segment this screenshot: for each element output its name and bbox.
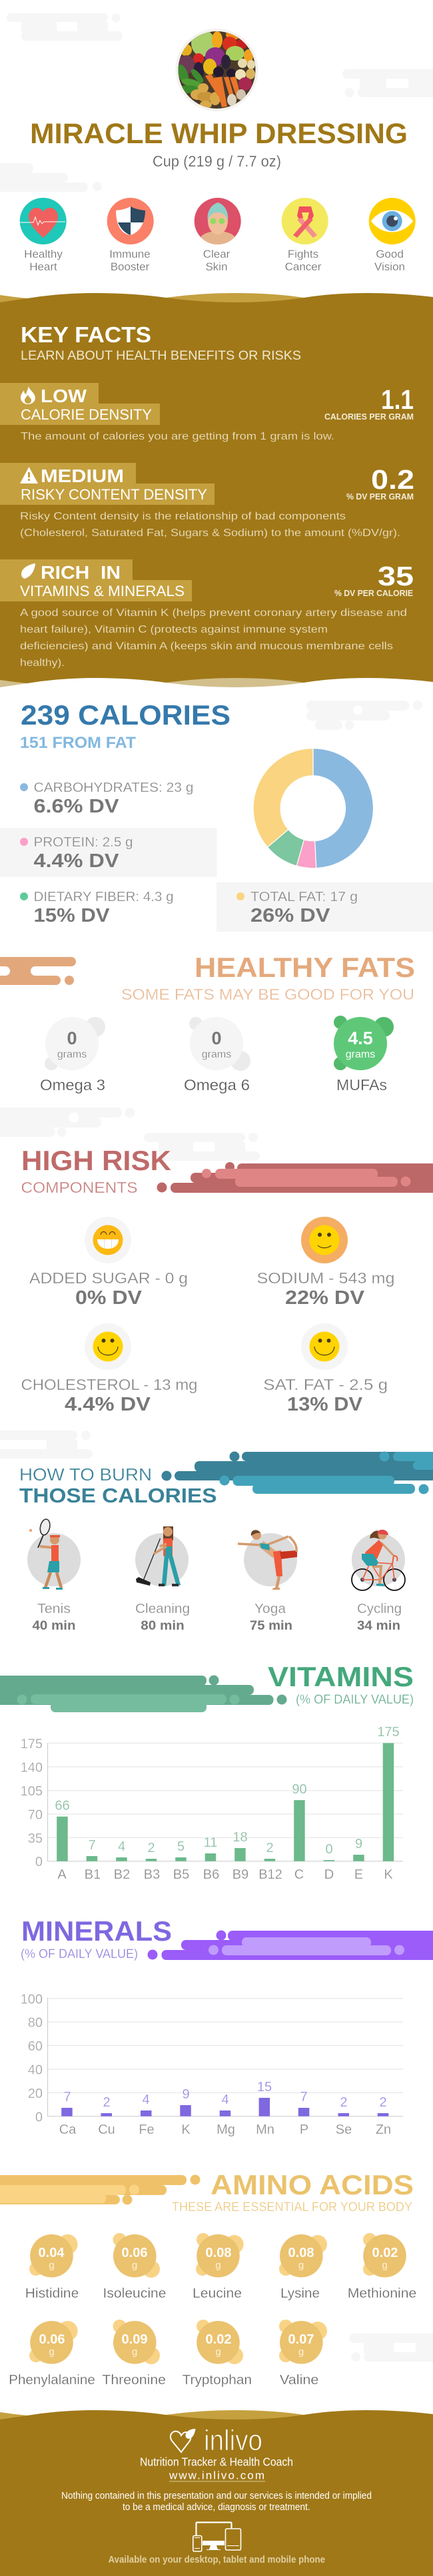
subheading: (% OF DAILY VALUE) <box>296 1693 414 1707</box>
fact: low calorie density <box>0 383 414 442</box>
fact: low calorie density: The amount of calories you are getting from 1 gram is low. <box>21 431 334 442</box>
bar chart: vitamins: 7 <box>88 1838 96 1853</box>
subheading: LEARN ABOUT HEALTH BENEFITS OR RISKS <box>21 349 301 363</box>
bar chart: vitamins: 9 <box>355 1837 362 1851</box>
fact: rich in vitamins and minerals: healthy). <box>20 657 65 669</box>
legend: protein: PROTEIN: 2.5 g <box>33 835 133 850</box>
activity: yoga: Yoga <box>254 1602 286 1616</box>
amino: threonine: g <box>132 2346 137 2358</box>
activity: cleaning: Cleaning <box>135 1602 190 1616</box>
legend: total fat: TOTAL FAT: 17 g <box>250 890 358 904</box>
amino: methionine: g <box>382 2260 388 2271</box>
heading: vitamins: VITAMINS <box>268 1661 414 1692</box>
amino: lysine: 0.08 <box>288 2246 314 2260</box>
bar chart: vitamins: 11 <box>204 1835 217 1850</box>
amino: valine: g <box>298 2346 304 2358</box>
bar chart: minerals: 2 <box>103 2095 111 2110</box>
panel: minerals <box>21 1915 433 2137</box>
fact: rich in vitamins and minerals: heart failure), Vitamin C (protects against immune system <box>20 624 328 635</box>
bar chart: vitamins: B12 <box>258 1867 282 1882</box>
subheading: components: COMPONENTS <box>21 1179 137 1196</box>
decoration: bars <box>148 1930 433 1960</box>
bar chart: minerals: P <box>300 2122 308 2137</box>
benefit labels: Skin <box>205 260 228 273</box>
bar chart: vitamins <box>21 1725 403 1882</box>
subheading: from fat: 151 FROM FAT <box>20 734 136 752</box>
fact: medium risky content density: (Cholesterol, Saturated Fat, Sugars & Sodium) to the amount (%DV/gr). <box>20 527 400 539</box>
serving size: Cup (219 g / 7.7 oz) <box>153 153 281 170</box>
footer <box>0 2410 433 2576</box>
bar chart: minerals: 60 <box>28 2039 43 2054</box>
benefit labels: Heart <box>29 260 57 273</box>
component: sodium: 22% DV <box>285 1287 365 1309</box>
decoration: bars <box>0 957 76 985</box>
amino: phenylalanine: Phenylalanine <box>9 2373 95 2388</box>
bar chart: vitamins: B1 <box>85 1867 101 1882</box>
heading: calories: 239 CALORIES <box>21 699 230 731</box>
background clouds: middle <box>0 1108 260 1161</box>
bar chart: vitamins: 70 <box>28 1808 43 1823</box>
amino: threonine: 0.09 <box>122 2332 147 2347</box>
website link: www.inlivo.com <box>169 2469 264 2482</box>
fact: medium risky content density: Risky Content density is the relationship of bad components <box>20 511 346 522</box>
bar chart: vitamins: 90 <box>292 1782 307 1797</box>
availability note: Available on your desktop, tablet and mobile phone <box>108 2554 325 2565</box>
disclaimer: Nothing contained in this presentation and our services is intended or implied <box>61 2491 372 2501</box>
legend: dietary fiber: 15% DV <box>33 905 110 926</box>
disclaimer: to be a medical advice, diagnosis or treatment. <box>123 2502 310 2513</box>
amino: methionine: 0.02 <box>372 2246 398 2260</box>
bar chart: vitamins: 2 <box>147 1841 155 1855</box>
fact: medium risky content density: RISKY CONTENT DENSITY <box>21 486 207 503</box>
donut chart <box>253 749 373 868</box>
activity: tennis <box>27 1518 81 1633</box>
bar chart: vitamins: B2 <box>114 1867 130 1882</box>
amino: valine: Valine <box>280 2373 318 2388</box>
amino: valine <box>279 2320 327 2388</box>
amino: lysine <box>279 2234 327 2301</box>
bar chart: vitamins: A <box>57 1867 67 1882</box>
bar chart: vitamins: C <box>294 1867 304 1882</box>
benefit labels <box>24 248 405 273</box>
fact: low calorie density: LOW <box>41 386 87 406</box>
omega 6 <box>184 1017 250 1094</box>
bar chart: vitamins: B3 <box>144 1867 160 1882</box>
fact: rich in vitamins and minerals: deficiencies) and Vitamin A (keeps skin and mucous membrane cells <box>20 641 393 652</box>
amino: histidine: g <box>49 2260 55 2271</box>
activity: yoga: 75 min <box>250 1619 292 1633</box>
bar chart: minerals: 4 <box>221 2093 229 2107</box>
panel: vitamins <box>0 1661 414 1882</box>
bar chart: minerals: 9 <box>182 2087 190 2102</box>
amino: histidine: Histidine <box>25 2286 79 2301</box>
fact: medium risky content density: % DV PER GRAM <box>346 492 414 501</box>
bar chart: minerals: 40 <box>28 2063 43 2078</box>
component: sodium: SODIUM - 543 mg <box>257 1269 394 1287</box>
benefit labels: Vision <box>374 260 405 273</box>
icon: immune shield <box>107 198 154 244</box>
mufas: MUFAs <box>336 1076 387 1094</box>
amino: isoleucine: 0.06 <box>122 2246 147 2260</box>
bar chart: minerals: Cu <box>98 2122 115 2137</box>
legend: protein <box>20 835 133 872</box>
amino: tryptophan: Tryptophan <box>183 2373 252 2388</box>
amino: histidine: 0.04 <box>39 2246 65 2260</box>
amino: tryptophan: g <box>215 2346 221 2358</box>
fact: low calorie density: CALORIE DENSITY <box>21 406 152 423</box>
heading: amino acids: AMINO ACIDS <box>211 2169 414 2200</box>
amino: phenylalanine: 0.06 <box>39 2332 65 2347</box>
component: sodium <box>257 1217 394 1309</box>
activity: tennis: 40 min <box>32 1619 76 1633</box>
bar chart: vitamins: 66 <box>55 1799 70 1813</box>
logo: inlivo: inlivo <box>204 2424 262 2457</box>
component: saturated fat: SAT. FAT - 2.5 g <box>263 1376 388 1393</box>
bar chart: minerals: 7 <box>300 2090 308 2104</box>
omega 3: grams <box>57 1049 87 1060</box>
bar chart: minerals: 2 <box>379 2095 387 2110</box>
decoration: bars <box>157 1162 433 1193</box>
tagline: Nutrition Tracker & Health Coach <box>140 2455 293 2469</box>
fact: rich in vitamins and minerals: % DV PER CALORIE <box>334 589 413 598</box>
subheading: SOME FATS MAY BE GOOD FOR YOU <box>121 986 414 1003</box>
bar chart: minerals: Se <box>336 2122 352 2137</box>
amino: leucine <box>193 2233 244 2301</box>
bar chart: minerals: 20 <box>28 2087 43 2101</box>
bar chart: minerals: 7 <box>63 2090 71 2104</box>
panel: how to burn those calories <box>19 1452 433 1633</box>
bar chart: minerals <box>21 1992 403 2137</box>
amino: lysine: Lysine <box>280 2286 320 2301</box>
component: added sugar <box>29 1217 188 1309</box>
bar chart: minerals: Fe <box>139 2122 155 2137</box>
activity: cycling <box>352 1530 405 1633</box>
mufas: 4.5 <box>348 1028 373 1048</box>
amino: methionine: Methionine <box>348 2286 416 2301</box>
bar chart: vitamins: 2 <box>266 1841 274 1855</box>
amino: methionine <box>348 2233 416 2301</box>
bar chart: minerals: 15 <box>257 2080 272 2094</box>
subheading: (% OF DAILY VALUE) <box>21 1947 138 1961</box>
icon: good vision <box>369 198 416 244</box>
bar chart: minerals: Mn <box>256 2122 274 2137</box>
activity: yoga <box>238 1530 297 1633</box>
fact: rich in vitamins and minerals <box>0 559 414 669</box>
icon: healthy heart <box>20 198 67 244</box>
panel: calories <box>0 699 433 932</box>
subheading: THESE ARE ESSENTIAL FOR YOUR BODY <box>172 2200 412 2214</box>
bar chart: vitamins: 4 <box>118 1839 125 1854</box>
omega 6: grams <box>202 1049 231 1060</box>
activity: cleaning: 80 min <box>141 1619 185 1633</box>
fact: low calorie density: 1.1 <box>381 384 414 415</box>
panel: high risk components <box>21 1145 433 1415</box>
legend: carbohydrates: 6.6% DV <box>33 796 119 817</box>
amino: valine: 0.07 <box>288 2332 314 2347</box>
bar chart: vitamins: 18 <box>232 1830 248 1845</box>
fact: rich in vitamins and minerals: RICH IN <box>41 562 121 583</box>
bar chart: minerals: Mg <box>217 2122 235 2137</box>
bar chart: minerals: 0 <box>35 2110 43 2124</box>
bar chart: vitamins: 175 <box>21 1737 43 1752</box>
heading: healthy fats: HEALTHY FATS <box>195 952 415 983</box>
fact: medium risky content density: MEDIUM <box>41 466 124 486</box>
amino: threonine <box>102 2320 166 2388</box>
bar chart: vitamins: 5 <box>177 1839 185 1854</box>
fact: low calorie density: CALORIES PER GRAM <box>324 412 414 422</box>
fact: rich in vitamins and minerals: 35 <box>378 561 414 591</box>
legend: carbohydrates <box>20 781 193 817</box>
bar chart: minerals: K <box>181 2122 191 2137</box>
benefit labels: Immune <box>109 248 151 260</box>
icon: clear skin <box>195 198 241 248</box>
bar chart: vitamins: E <box>354 1867 363 1882</box>
background clouds: header <box>0 13 433 192</box>
amino: leucine: 0.08 <box>206 2246 231 2260</box>
benefit labels: Fights <box>288 248 318 260</box>
legend: dietary fiber: DIETARY FIBER: 4.3 g <box>33 890 173 904</box>
component: cholesterol: CHOLESTEROL - 13 mg <box>21 1376 197 1393</box>
panel: key facts <box>0 293 433 696</box>
amino: phenylalanine: g <box>49 2346 55 2358</box>
panel: healthy fats <box>0 952 415 1094</box>
bar chart: vitamins: D <box>324 1867 334 1882</box>
bar chart: vitamins: 175 <box>377 1725 400 1740</box>
bar chart: vitamins: 35 <box>28 1831 43 1846</box>
title: MIRACLE WHIP DRESSING <box>30 118 408 150</box>
mufas <box>334 1016 394 1094</box>
component: saturated fat <box>263 1323 388 1415</box>
background cloud: before burn <box>0 1431 93 1458</box>
fact: rich in vitamins and minerals: A good source of Vitamin K (helps prevent coronary artery disease and <box>20 607 407 619</box>
icon: devices <box>193 2523 241 2551</box>
activity: cycling: 34 min <box>357 1619 400 1633</box>
omega 3: 0 <box>67 1028 77 1048</box>
bar chart: vitamins: 105 <box>21 1784 43 1799</box>
icon: fights cancer ribbon <box>282 198 328 244</box>
bar chart: vitamins: 0 <box>35 1855 43 1869</box>
heading: high risk: HIGH RISK <box>21 1145 171 1176</box>
health benefits row <box>20 198 416 273</box>
bar chart: vitamins: B9 <box>232 1867 248 1882</box>
benefit labels: Healthy <box>24 248 63 260</box>
amino: histidine <box>25 2234 79 2301</box>
heading: those calories: THOSE CALORIES <box>19 1484 217 1507</box>
fact: rich in vitamins and minerals: VITAMINS & MINERALS <box>20 583 185 599</box>
benefit labels: Booster <box>111 260 150 273</box>
amino: leucine: g <box>215 2260 221 2271</box>
bar chart: minerals: Ca <box>59 2122 77 2137</box>
bar chart: minerals: 80 <box>28 2016 43 2031</box>
legend: dietary fiber <box>20 890 173 926</box>
decoration: bars <box>0 2175 200 2204</box>
amino: tryptophan <box>183 2320 252 2388</box>
amino: lysine: g <box>298 2260 304 2271</box>
component: cholesterol <box>21 1323 197 1415</box>
decoration: bars <box>0 1676 286 1712</box>
omega 6: 0 <box>211 1028 222 1048</box>
amino: leucine: Leucine <box>193 2286 242 2301</box>
benefit labels: Good <box>376 248 404 260</box>
bar chart: minerals: 2 <box>340 2095 348 2110</box>
component: added sugar: 0% DV <box>75 1287 143 1309</box>
fact: medium risky content density <box>0 463 414 539</box>
amino: tryptophan: 0.02 <box>206 2332 231 2347</box>
bar chart: minerals: Zn <box>376 2122 391 2137</box>
bar chart: vitamins: B6 <box>203 1867 219 1882</box>
omega 3: Omega 3 <box>40 1076 105 1094</box>
mufas: grams <box>346 1049 375 1060</box>
heading: key facts: KEY FACTS <box>21 322 151 347</box>
decoration: bars <box>161 1452 433 1494</box>
photo: vegetables <box>175 29 258 111</box>
bar chart: minerals: 100 <box>21 1992 43 2007</box>
benefit labels: Cancer <box>285 260 322 273</box>
disclaimer <box>61 2491 372 2513</box>
component: added sugar: ADDED SUGAR - 0 g <box>29 1269 188 1287</box>
amino: isoleucine: Isoleucine <box>103 2286 167 2301</box>
activity: cleaning <box>135 1526 190 1633</box>
panel: amino acids <box>0 2169 416 2388</box>
bar chart: vitamins: 0 <box>325 1842 333 1857</box>
legend: total fat: 26% DV <box>250 905 330 926</box>
activity: cycling: Cycling <box>357 1602 402 1616</box>
amino: isoleucine: g <box>132 2260 137 2271</box>
legend: carbohydrates: CARBOHYDRATES: 23 g <box>33 781 193 795</box>
heading: minerals: MINERALS <box>21 1915 172 1947</box>
amino: phenylalanine <box>9 2321 95 2388</box>
logo: inlivo <box>171 2424 262 2457</box>
bar chart: vitamins: B5 <box>173 1867 189 1882</box>
omega 3 <box>40 1017 105 1094</box>
bar chart: vitamins: K <box>384 1867 393 1882</box>
bar chart: minerals: 4 <box>142 2093 150 2107</box>
amino: isoleucine <box>103 2233 167 2301</box>
bar chart: vitamins: 140 <box>21 1761 43 1775</box>
heading: how to burn: HOW TO BURN <box>19 1464 152 1484</box>
benefit labels: Clear <box>203 248 230 260</box>
highlight panels <box>0 828 217 877</box>
activity: tennis: Tenis <box>37 1602 71 1616</box>
omega 6: Omega 6 <box>184 1076 250 1094</box>
fact: medium risky content density: 0.2 <box>371 464 414 495</box>
amino: threonine: Threonine <box>102 2373 166 2388</box>
component: cholesterol: 4.4% DV <box>65 1394 151 1415</box>
background cloud: near amino acids <box>349 2334 433 2362</box>
legend: total fat <box>236 890 358 926</box>
component: saturated fat: 13% DV <box>287 1394 363 1415</box>
legend: protein: 4.4% DV <box>33 850 119 872</box>
